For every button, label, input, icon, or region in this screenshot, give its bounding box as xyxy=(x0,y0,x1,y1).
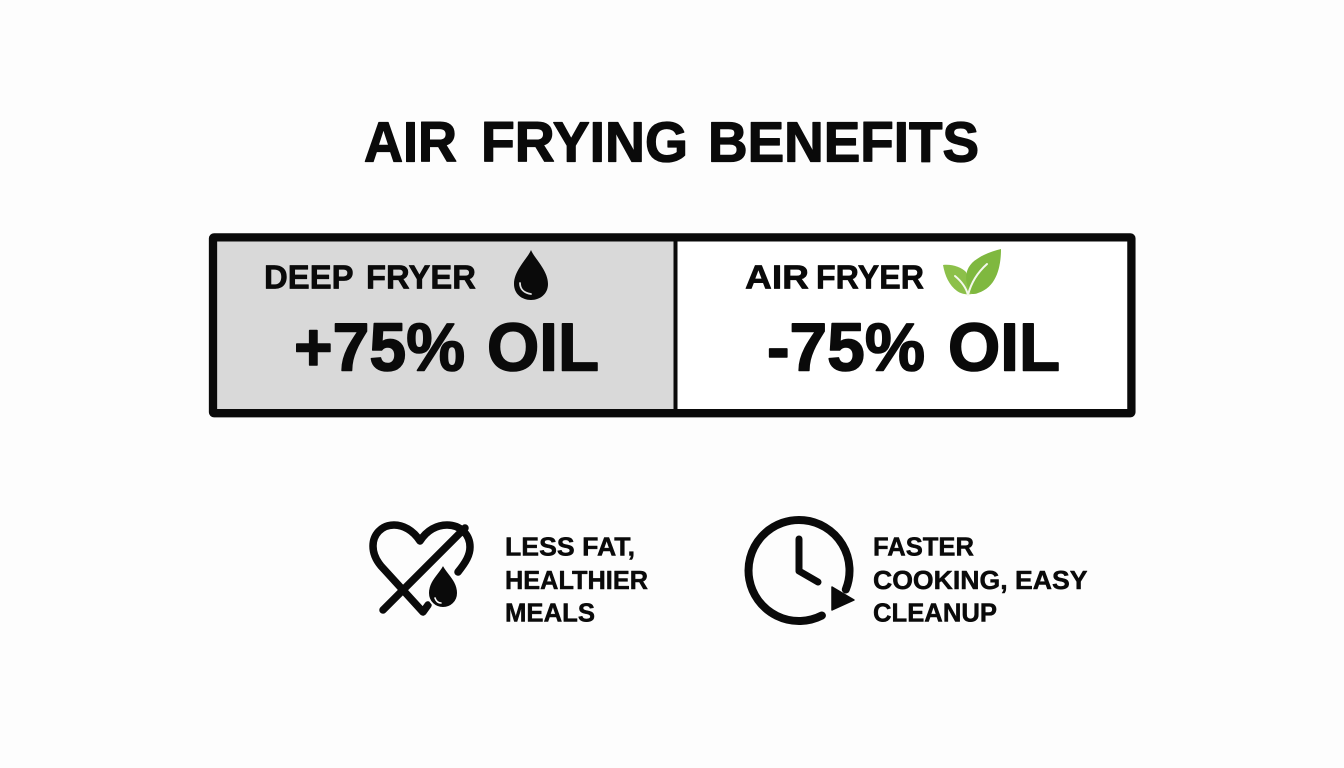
icon: clock with arrow xyxy=(749,520,854,621)
air fryer label: AIR xyxy=(745,260,809,297)
less fat text: HEALTHIER xyxy=(505,567,648,595)
icon: oil drop xyxy=(514,250,548,300)
less fat text: LESS FAT, xyxy=(505,534,635,562)
panel frame xyxy=(213,237,1131,413)
deep fryer label: FRYER xyxy=(366,260,476,297)
panel: deep fryer xyxy=(213,237,676,413)
air fryer stat: OIL xyxy=(948,310,1060,386)
panel: air fryer xyxy=(676,237,1131,413)
air fryer label: FRYER xyxy=(816,260,924,297)
faster cooking text: CLEANUP xyxy=(873,600,997,628)
deep fryer stat: OIL xyxy=(487,310,599,386)
less fat text: MEALS xyxy=(505,600,595,628)
deep fryer label: DEEP xyxy=(264,260,353,297)
icon: crossed heart with drop xyxy=(373,525,470,612)
faster cooking text: COOKING, EASY xyxy=(873,567,1087,595)
deep fryer stat: +75% xyxy=(294,310,465,386)
air fryer stat: -75% xyxy=(767,310,925,386)
title: FRYING xyxy=(481,111,688,175)
comparison panel xyxy=(213,237,1131,413)
benefit: faster cooking xyxy=(749,520,1094,628)
title: AIR xyxy=(364,111,457,175)
benefit: less fat xyxy=(373,525,655,628)
panel divider xyxy=(674,237,678,413)
title: BENEFITS xyxy=(708,111,979,175)
faster cooking text: FASTER xyxy=(873,534,974,562)
icon: green leaves xyxy=(943,249,1001,295)
